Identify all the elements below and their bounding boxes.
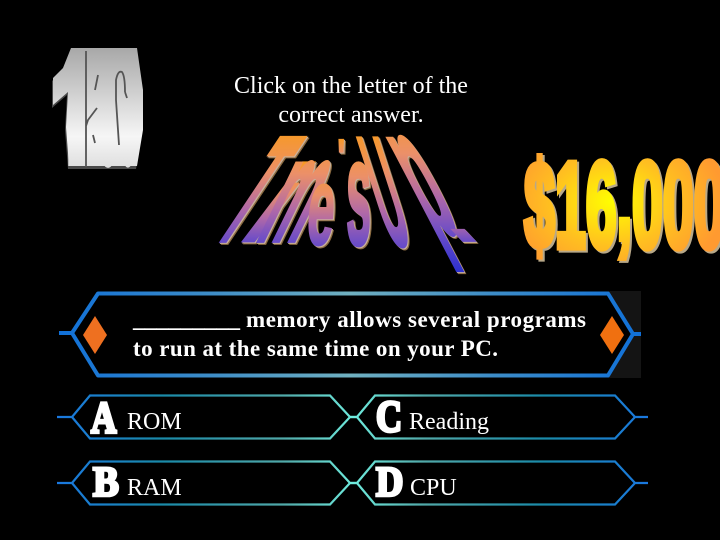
answer A: ROM xyxy=(127,409,182,435)
time's up graphic xyxy=(189,74,495,278)
time's up graphic: s xyxy=(346,110,371,277)
left diamond xyxy=(83,316,107,354)
answer C: Reading xyxy=(409,409,489,435)
answer D: CPU xyxy=(410,475,457,501)
time's up graphic: ' xyxy=(337,130,345,186)
instruction text xyxy=(234,73,468,128)
time's up graphic: m xyxy=(239,107,364,273)
time's up graphic: e xyxy=(303,146,341,269)
time's up graphic: T xyxy=(189,105,328,273)
question text xyxy=(132,307,586,361)
question text: memory allows several programs xyxy=(246,307,586,332)
prize amount: $16 xyxy=(524,138,617,274)
answer D: D xyxy=(376,458,403,505)
instruction text: correct answer. xyxy=(278,102,424,128)
prize amount: , xyxy=(617,129,632,265)
timer graphic: 1:30 xyxy=(66,18,138,202)
prize amount: , xyxy=(619,131,634,267)
answer D xyxy=(350,458,648,505)
time's up graphic: p xyxy=(350,74,484,272)
question text: to run at the same time on your PC. xyxy=(133,336,498,361)
question panel xyxy=(59,291,641,378)
right diamond xyxy=(600,316,624,354)
question text: _________ xyxy=(132,307,241,332)
time's up graphic: i xyxy=(220,144,335,264)
instruction text: Click on the letter of the xyxy=(234,73,468,99)
answer C xyxy=(350,392,648,441)
answer C: C xyxy=(376,392,402,441)
answer B: RAM xyxy=(127,475,182,501)
prize amount: $16 xyxy=(526,140,619,276)
answer A xyxy=(57,392,358,442)
answer B: B xyxy=(93,459,119,505)
time's up graphic: U xyxy=(344,104,426,278)
prize amount xyxy=(524,129,720,276)
answer B xyxy=(57,459,358,505)
time's up graphic: . xyxy=(394,173,495,257)
answer A: A xyxy=(91,392,117,442)
